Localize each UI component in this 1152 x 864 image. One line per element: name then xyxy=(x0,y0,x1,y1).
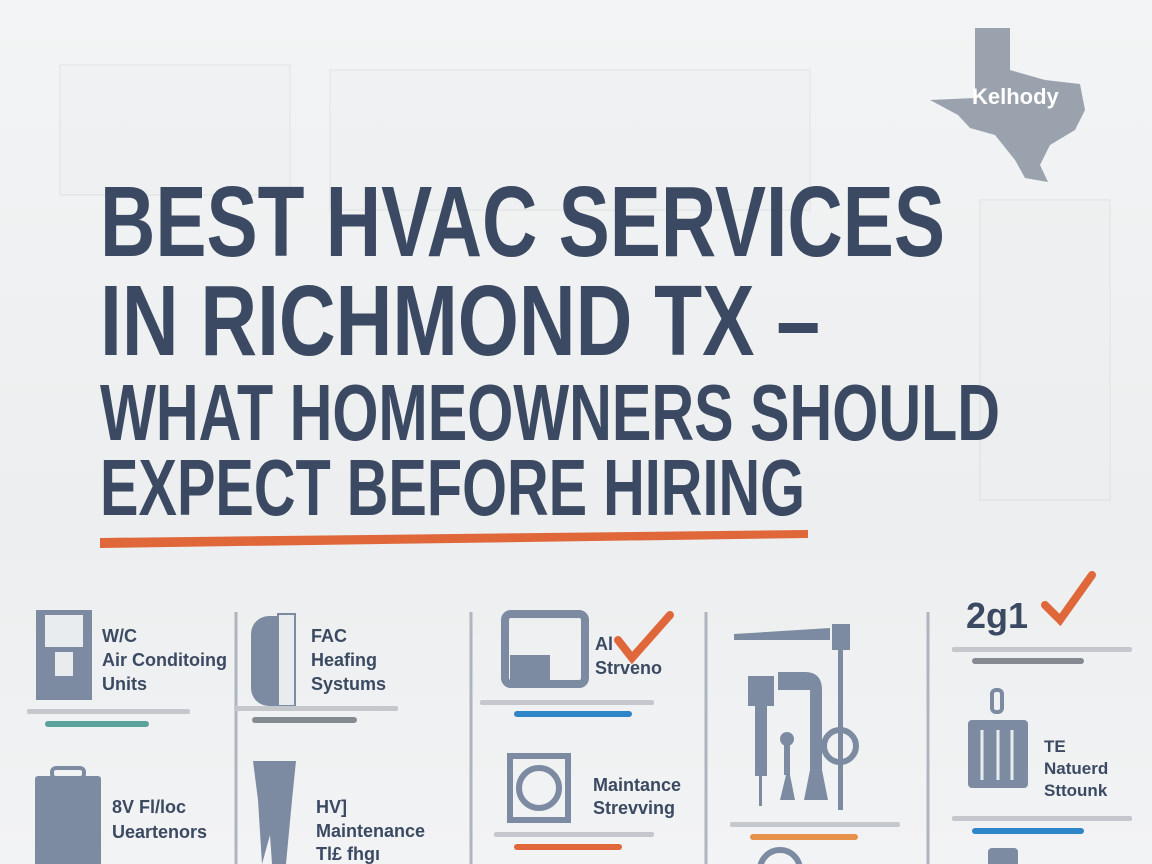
column 5: 2g1 xyxy=(966,595,1028,636)
column 2: Maintenance xyxy=(316,821,425,841)
column 5: TE xyxy=(1044,737,1066,756)
title: IN RICHMOND TX – xyxy=(100,265,820,377)
dividers xyxy=(236,612,928,864)
column 5: Sttounk xyxy=(1044,781,1108,800)
texas map logo: Kelhody xyxy=(972,84,1060,109)
column 3: Strveno xyxy=(595,658,662,678)
column 3: Al xyxy=(595,634,613,654)
column 1: Ueartenors xyxy=(112,822,207,842)
column 1: Units xyxy=(102,674,147,694)
column 2: HV] xyxy=(316,797,347,817)
column 1: Air Conditoing xyxy=(102,650,227,670)
texas map logo xyxy=(930,28,1085,182)
column 1: W/C xyxy=(102,626,137,646)
column 3: Strevving xyxy=(593,798,675,818)
orange underline xyxy=(100,530,808,548)
column 5: Natuerd xyxy=(1044,759,1108,778)
column 2 xyxy=(234,614,425,864)
column 2: FAC xyxy=(311,626,347,646)
column 4 tools xyxy=(730,624,900,864)
column 2: Systums xyxy=(311,674,386,694)
column 3: Maintance xyxy=(593,775,681,795)
column 1 xyxy=(27,610,227,864)
column 2: Tl£ fhgı xyxy=(316,844,380,864)
background shutters xyxy=(60,65,1110,500)
column 5 xyxy=(952,575,1132,864)
column 2: Heafing xyxy=(311,650,377,670)
column 1: 8V Fl/loc xyxy=(112,797,186,817)
column 3 xyxy=(480,614,681,850)
title: EXPECT BEFORE HIRING xyxy=(100,443,805,532)
title xyxy=(100,166,1000,532)
